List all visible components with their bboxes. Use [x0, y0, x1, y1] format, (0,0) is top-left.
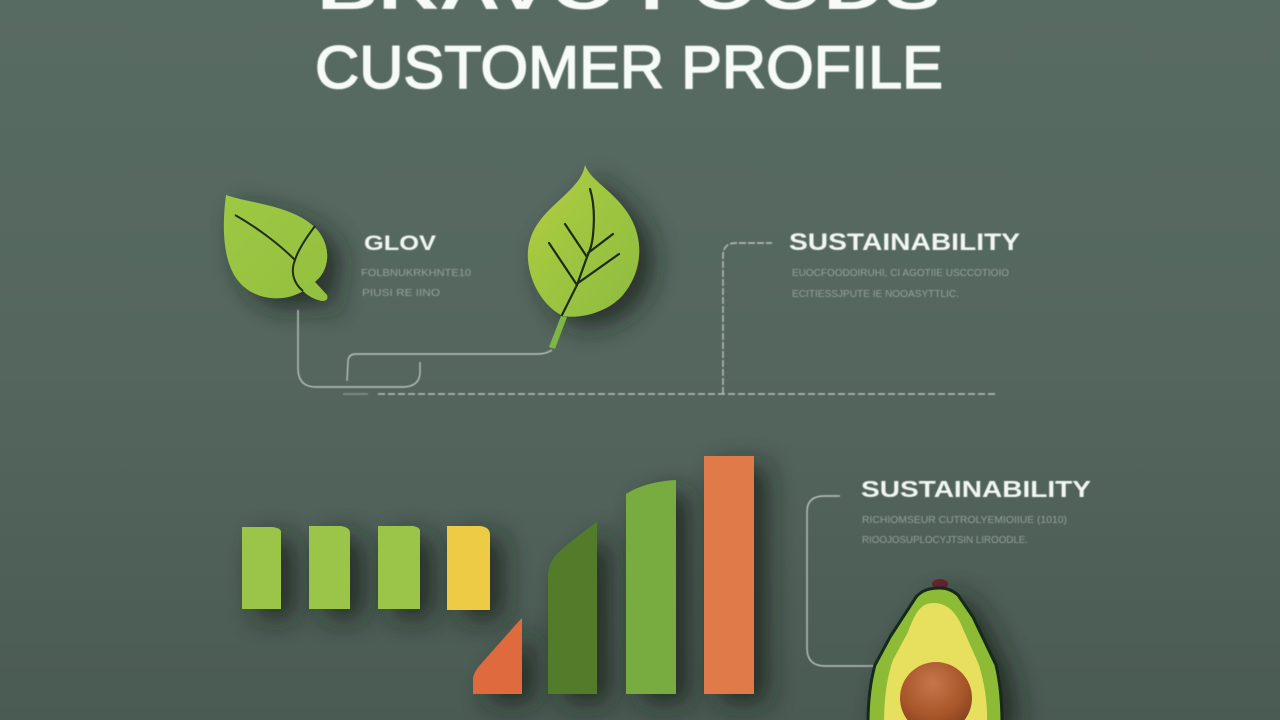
icon: upright leaf [528, 165, 639, 349]
text block: GLOV: FOLBNUKRKHNTE10 [361, 267, 471, 279]
icon: avocado [868, 579, 1002, 720]
bar chart: rising bars [473, 456, 754, 694]
text block: sustainability lower: RICHIOMSEUR CUTROLYEMIOIIUE (1010) [862, 514, 1067, 526]
text block: sustainability lower: RIOOJOSUPLOCYJTSIN LIROODLE. [862, 534, 1028, 546]
title: CUSTOMER PROFILE [315, 34, 943, 101]
text block: GLOV: GLOV [364, 232, 436, 255]
text block: GLOV [361, 232, 471, 299]
text block: sustainability upper [789, 229, 1020, 300]
text block: sustainability lower: SUSTAINABILITY [861, 476, 1091, 502]
text block: GLOV: PIUSI RE IINO [362, 287, 440, 299]
icon: left leaf [224, 195, 327, 301]
text block: sustainability upper: SUSTAINABILITY [789, 229, 1020, 256]
connector lines [298, 243, 997, 666]
title [315, 0, 943, 101]
text block: sustainability lower [861, 476, 1091, 546]
bar chart: small bars [242, 526, 490, 610]
text block: sustainability upper: ECITIESSJPUTE IE NOOASYTTLIC. [792, 288, 959, 300]
text block: sustainability upper: EUOCFOODOIRUHI, CI AGOTIIE USCCOTIOIO [792, 267, 1009, 279]
